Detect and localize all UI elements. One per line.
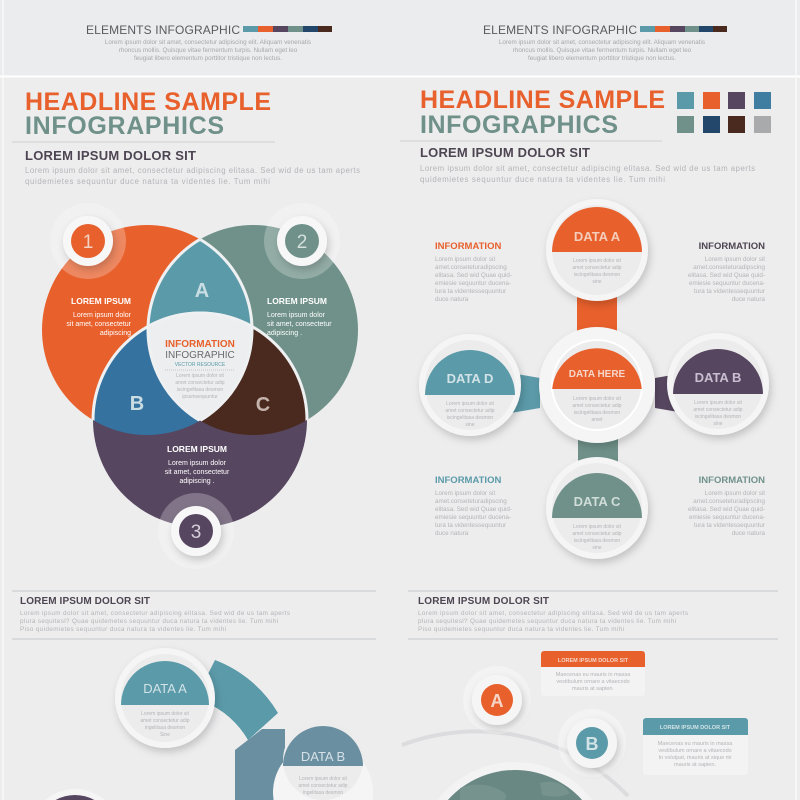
right subheading and text	[420, 145, 755, 184]
venn labels: B	[130, 393, 144, 415]
bottom left section heading: Lorem ipsum dolor sit amet, consectetur adipiscing elitasa. Sed wid de us tam aperts	[20, 610, 290, 617]
bottom data A circle: ingelitasa desmon	[145, 725, 185, 731]
header right: elements infographic: feugiat libero elementum porttitor tristique non lectus.	[528, 55, 676, 62]
venn text: teal: adipiscing .	[267, 330, 302, 337]
badge B: B	[586, 734, 598, 754]
badge 3	[158, 493, 234, 569]
venn text: teal	[267, 296, 332, 337]
venn text: purple	[165, 444, 230, 485]
right headline	[420, 86, 665, 139]
center circle: data here: iscingelitasa desmon	[574, 410, 620, 416]
callout orange: Maecenas eu mauris in massa	[556, 672, 631, 678]
right subheading and text: quidemietes sequuntur duce natura ta videntes lie. Tum mihi	[420, 175, 665, 184]
info text bottom-right: tura ta videntessequuntur	[694, 522, 765, 529]
badge 2	[264, 203, 340, 279]
venn text: teal: LOREM IPSUM	[267, 296, 327, 306]
info text top-left: INFORMATION	[435, 241, 501, 252]
data A circle: DATA A	[574, 229, 621, 244]
venn text: purple: LOREM IPSUM	[167, 444, 227, 454]
badge B	[558, 709, 626, 777]
center circle: data here: amet consectetur adip	[572, 403, 622, 409]
center circle: data here	[539, 327, 655, 443]
data C circle: amet consectetur adip	[572, 531, 622, 537]
data B circle	[667, 333, 769, 435]
info text top-right: INFORMATION	[699, 241, 765, 252]
info text bottom-left: emiesie sequuntur ducena-	[435, 514, 511, 521]
info text bottom-left: tura ta videntessequuntur	[435, 522, 506, 529]
bottom data A circle: Sine	[160, 732, 170, 738]
info text top-left: amet.conseteturadipscing	[435, 264, 507, 271]
badge 2: 2	[297, 232, 307, 253]
badge A	[463, 666, 531, 734]
data C circle	[546, 457, 648, 559]
venn labels: A	[195, 280, 209, 302]
left subheading and text: quidemietes sequuntur duce natura ta videntes lie. Tum mihi	[25, 177, 270, 186]
big arc	[402, 731, 628, 796]
data D circle	[419, 334, 521, 436]
callout teal: vestibulum ornare a vitaecodo	[658, 748, 732, 754]
info text bottom-right: emiesie sequuntur ducena-	[689, 514, 765, 521]
header left: elements infographic: ELEMENTS INFOGRAPHIC	[86, 23, 240, 37]
right subheading and text: Lorem ipsum dolor sit amet, consectetur adipiscing elitasa. Sed wid de us tam aperts	[420, 164, 755, 173]
venn center text: ipsumsequuntur	[182, 394, 218, 400]
badge 1	[50, 203, 126, 279]
data D circle: sine	[465, 422, 475, 428]
bottom right section heading	[408, 591, 778, 639]
venn center text: INFOGRAPHIC	[165, 350, 235, 361]
bottom left section heading: Piso quidemietes sequuntur duca natura ta videntes lie. Tum mihi	[20, 626, 226, 633]
info text top-left	[435, 241, 512, 303]
info text bottom-left: Lorem ipsum dolor sit	[435, 490, 495, 497]
info text top-right: elitasa. Sed wid Quae quid-	[688, 272, 765, 279]
info text top-left: tura ta videntessequuntur	[435, 288, 506, 295]
bottom left section heading: plura sequitesl? Quae quidemetes sequuntur duca natura ta videntes lie. Tum mihi	[20, 618, 278, 625]
callout teal: mauris at sapien.	[674, 762, 716, 768]
info text top-right	[688, 241, 765, 303]
venn text: teal: Lorem ipsum dolor	[267, 312, 326, 319]
data diagram connectors	[505, 292, 690, 475]
venn text: teal: sit amet, consectetur	[267, 321, 332, 328]
data C circle: iscingelitasa desmon	[574, 538, 620, 544]
info text top-left: Lorem ipsum dolor sit	[435, 256, 495, 263]
data D circle: Lorem ipsum dolor sit	[446, 401, 495, 407]
data C circle: sine	[592, 545, 602, 551]
bottom data B circle: amet consectetur adip	[298, 783, 348, 789]
data B circle: sine	[713, 421, 723, 427]
info text bottom-right: amet.conseteturadipscing	[693, 498, 765, 505]
bottom data A circle: Lorem ipsum dolor sit	[141, 711, 190, 717]
info text bottom-left: elitasa. Sed wid Quae quid-	[435, 506, 512, 513]
left headline: HEADLINE SAMPLE	[25, 88, 271, 116]
badge A: A	[490, 691, 504, 711]
data A circle: Lorem ipsum dolor sit	[573, 258, 622, 264]
venn center text: VECTOR RESOURCE	[175, 362, 226, 368]
header right: elements infographic	[483, 23, 727, 62]
bottom left section heading: LOREM IPSUM DOLOR SIT	[20, 596, 150, 607]
header right: elements infographic: Lorem ipsum dolor sit amet, consectetur adipiscing elit. Aliquam venenatis	[499, 39, 705, 46]
bottom data A circle: DATA A	[143, 681, 187, 696]
venn diagram	[42, 225, 358, 527]
info text top-right: amet.conseteturadipscing	[693, 264, 765, 271]
header right: elements infographic: ELEMENTS INFOGRAPHIC	[483, 23, 637, 37]
venn center text: iscingelitasa desmon	[177, 387, 223, 393]
center circle: data here: amet	[591, 417, 603, 423]
info text top-right: Lorem ipsum dolor sit	[705, 256, 765, 263]
venn center text: amet consectetur adip	[175, 380, 225, 386]
data B circle: Lorem ipsum dolor sit	[694, 400, 743, 406]
info text top-left: duce natura	[435, 296, 469, 303]
left subheading and text: Lorem ipsum dolor sit amet, consectetur adipiscing elitasa. Sed wid de us tam aperts	[25, 166, 360, 175]
info text bottom-right: INFORMATION	[699, 475, 765, 486]
data D circle: amet consectetur adip	[445, 408, 495, 414]
right subheading and text: LOREM IPSUM DOLOR SIT	[420, 145, 590, 160]
venn text: orange: LOREM IPSUM	[71, 296, 131, 306]
left subheading and text	[25, 148, 360, 186]
bottom data B circle: ingelitasa desmon	[303, 790, 343, 796]
data A circle: amet consectetur adip	[572, 265, 622, 271]
bottom data A circle	[115, 648, 215, 748]
data A circle: iscingelitasa desmon	[574, 272, 620, 278]
callout orange: mauris at sapien.	[572, 686, 614, 692]
bottom left connectors	[205, 660, 285, 800]
callout teal: In volutpat, mauris at sique mi	[658, 755, 732, 761]
data D circle: iscingelitasa desmon	[447, 415, 493, 421]
callout teal: LOREM IPSUM DOLOR SIT	[660, 725, 731, 731]
header left: elements infographic: Lorem ipsum dolor sit amet, consectetur adipiscing elit. Aliquam venenatis	[105, 39, 311, 46]
callout orange: LOREM IPSUM DOLOR SIT	[558, 658, 629, 664]
venn text: orange: adipiscing	[100, 330, 131, 337]
header left: elements infographic: feugiat libero elementum porttitor tristique non lectus.	[134, 55, 282, 62]
venn labels: C	[256, 394, 270, 416]
bottom left section heading	[12, 591, 376, 639]
venn text: purple: Lorem ipsum dolor	[168, 460, 227, 467]
venn text: purple: adipiscing .	[179, 478, 215, 485]
info text bottom-left: duce natura	[435, 530, 469, 537]
header right: elements infographic: rhoncus mollis. Quisque vitae fermentum turpis. Nullam eget leo	[513, 47, 692, 54]
info text bottom-right: Lorem ipsum dolor sit	[705, 490, 765, 497]
info text top-right: tura ta videntessequuntur	[694, 288, 765, 295]
left headline: INFOGRAPHICS	[25, 112, 224, 140]
venn labels	[130, 280, 270, 416]
callout orange	[541, 651, 645, 696]
callout orange: vestibulum ornare a vitaecodo	[556, 679, 630, 685]
data A circle: sine	[592, 279, 602, 285]
info text bottom-left: INFORMATION	[435, 475, 501, 486]
info text bottom-right: duce natura	[732, 530, 765, 537]
info text top-right: duce natura	[732, 296, 765, 303]
bottom right section heading: Lorem ipsum dolor sit amet, consectetur adipiscing elitasa. Sed wid de us tam aperts	[418, 610, 688, 617]
badge 1: 1	[83, 232, 93, 253]
venn center text: INFORMATION	[165, 339, 235, 350]
venn center text: Lorem ipsum dolor sit	[176, 373, 225, 379]
center circle: data here: Lorem ipsum dolor sit	[573, 396, 622, 402]
data C circle: DATA C	[574, 494, 621, 509]
color swatches	[677, 92, 771, 133]
bottom right section heading: LOREM IPSUM DOLOR SIT	[418, 596, 549, 607]
header left: elements infographic: rhoncus mollis. Quisque vitae fermentum turpis. Nullam eget leo	[119, 47, 298, 54]
info text top-left: elitasa. Sed wid Quae quid-	[435, 272, 512, 279]
callout teal	[643, 718, 748, 775]
right headline: INFOGRAPHICS	[420, 111, 618, 139]
bottom right section heading: plura sequitesl? Quae quidemetes sequuntur duca natura ta videntes lie. Tum mihi	[418, 618, 676, 625]
bottom data B circle: DATA B	[301, 749, 345, 764]
right headline: HEADLINE SAMPLE	[420, 86, 665, 114]
bottom data B circle	[273, 720, 373, 800]
globe	[438, 762, 592, 800]
data B circle: amet consectetur adip	[693, 407, 743, 413]
left headline	[25, 88, 271, 140]
info text bottom-right	[688, 475, 765, 537]
info text top-left: emiesie sequuntur ducena-	[435, 280, 511, 287]
bottom purple circle partial	[45, 789, 105, 800]
bottom right section heading: Piso quidemietes sequuntur duca natura ta videntes lie. Tum mihi	[418, 626, 624, 633]
badge 3: 3	[191, 522, 201, 543]
info text top-right: emiesie sequuntur ducena-	[689, 280, 765, 287]
data B circle: iscingelitasa desmon	[695, 414, 741, 420]
info text bottom-left	[435, 475, 512, 537]
bottom data A circle: amet consectetur adip	[140, 718, 190, 724]
data A circle	[546, 199, 648, 301]
info text bottom-right: elitasa. Sed wid Quae quid-	[688, 506, 765, 513]
center circle: data here: DATA HERE	[569, 369, 626, 380]
info text bottom-left: amet.conseteturadipscing	[435, 498, 507, 505]
venn text: orange	[66, 296, 132, 337]
data C circle: Lorem ipsum dolor sit	[573, 524, 622, 530]
venn text: orange: sit amet, consectetur	[66, 321, 132, 328]
data B circle: DATA B	[695, 370, 741, 385]
venn center text	[165, 339, 235, 400]
header left: elements infographic	[86, 23, 332, 62]
bottom data B circle: Lorem ipsum dolor sit	[299, 776, 348, 782]
callout teal: Maecenas eu mauris in massa	[658, 741, 733, 747]
venn text: purple: sit amet, consectetur	[165, 469, 230, 476]
data D circle: DATA D	[447, 371, 493, 386]
left subheading and text: LOREM IPSUM DOLOR SIT	[25, 148, 196, 163]
venn text: orange: Lorem ipsum dolor	[73, 312, 132, 319]
